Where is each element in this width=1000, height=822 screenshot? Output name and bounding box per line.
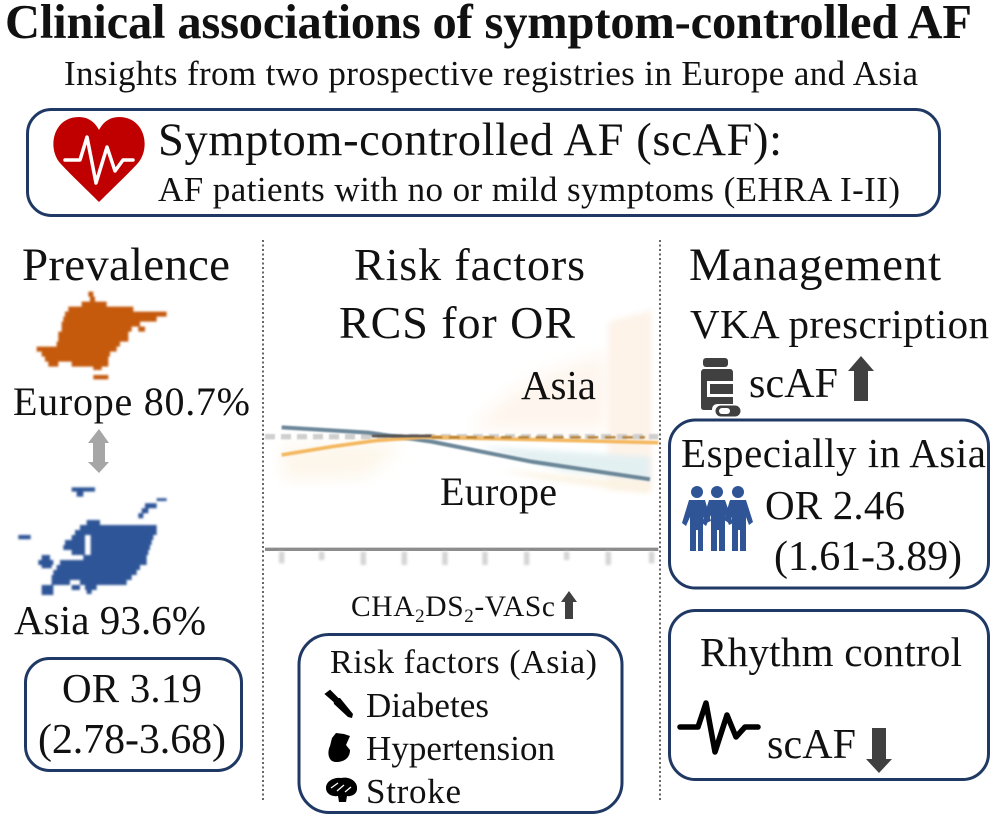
arrow: rhythm down	[866, 728, 892, 773]
map: Europe in orange	[37, 292, 167, 379]
callout: odds ratio	[26, 658, 242, 770]
CHA2DS2-VASc score label: 2	[464, 606, 474, 627]
icon: brain	[326, 778, 357, 802]
definition heading: Symptom-controlled AF (scAF):	[158, 115, 782, 166]
Europe curve label: Europe	[440, 469, 557, 514]
Europe prevalence: Europe 80.7%	[13, 379, 250, 424]
callout: odds ratio: OR 3.19	[62, 665, 202, 711]
Especially in Asia: Especially in Asia	[681, 430, 986, 476]
Asia curve label: Asia	[521, 362, 596, 408]
arrow: score up	[561, 591, 577, 619]
CHA2DS2-VASc score label: DS	[425, 591, 464, 623]
VKA prescription heading: VKA prescription	[690, 301, 989, 347]
icon: medicine bottle	[701, 358, 741, 417]
CHA2DS2-VASc score label: -VASc	[474, 591, 555, 623]
panel: Asian risk factors	[299, 634, 622, 812]
icon: dropper	[326, 691, 353, 718]
Rhythm scAF label: scAF	[767, 722, 856, 768]
Diabetes: Diabetes	[366, 686, 489, 725]
panel: scAF definition	[28, 110, 940, 216]
definition text: AF patients with no or mild symptoms (EHRA I-II)	[158, 170, 900, 209]
prevalence heading: Prevalence	[22, 239, 230, 291]
map: Asia in blue	[18, 487, 167, 595]
VKA scAF label: scAF	[749, 361, 838, 407]
arrow: VKA up	[848, 356, 874, 401]
icon: heart organ	[328, 733, 350, 762]
Asia prevalence: Asia 93.6%	[14, 597, 206, 643]
Rhythm control heading: Rhythm control	[700, 629, 962, 675]
callout: odds ratio: (2.78-3.68)	[38, 717, 226, 763]
CHA2DS2-VASc score label: 2	[415, 606, 425, 627]
panel: prevalence	[13, 239, 250, 770]
confidence interval: (1.61-3.89)	[774, 534, 962, 580]
icon: heart with pulse	[53, 117, 145, 202]
panel: rhythm control	[670, 610, 988, 780]
Stroke: Stroke	[366, 772, 461, 811]
risk factors list heading: Risk factors (Asia)	[330, 644, 597, 681]
panel: risk factors	[265, 239, 658, 812]
panel: management	[670, 239, 989, 780]
subtitle: Insights from two prospective registries in Europe and Asia	[64, 54, 918, 93]
arrow: comparison	[88, 429, 109, 473]
OR 2.46: OR 2.46	[765, 482, 905, 528]
management heading: Management	[689, 239, 941, 291]
chart: RCS for OR	[265, 297, 658, 565]
icon: people	[682, 486, 753, 551]
Hypertension: Hypertension	[366, 729, 555, 768]
panel: Asia odds ratio	[670, 420, 988, 588]
risk factors heading: Risk factors	[354, 239, 585, 290]
CHA2DS2-VASc score label: CHA	[351, 591, 415, 623]
chart title: RCS for OR	[339, 297, 575, 348]
icon: rhythm trace	[680, 703, 758, 752]
